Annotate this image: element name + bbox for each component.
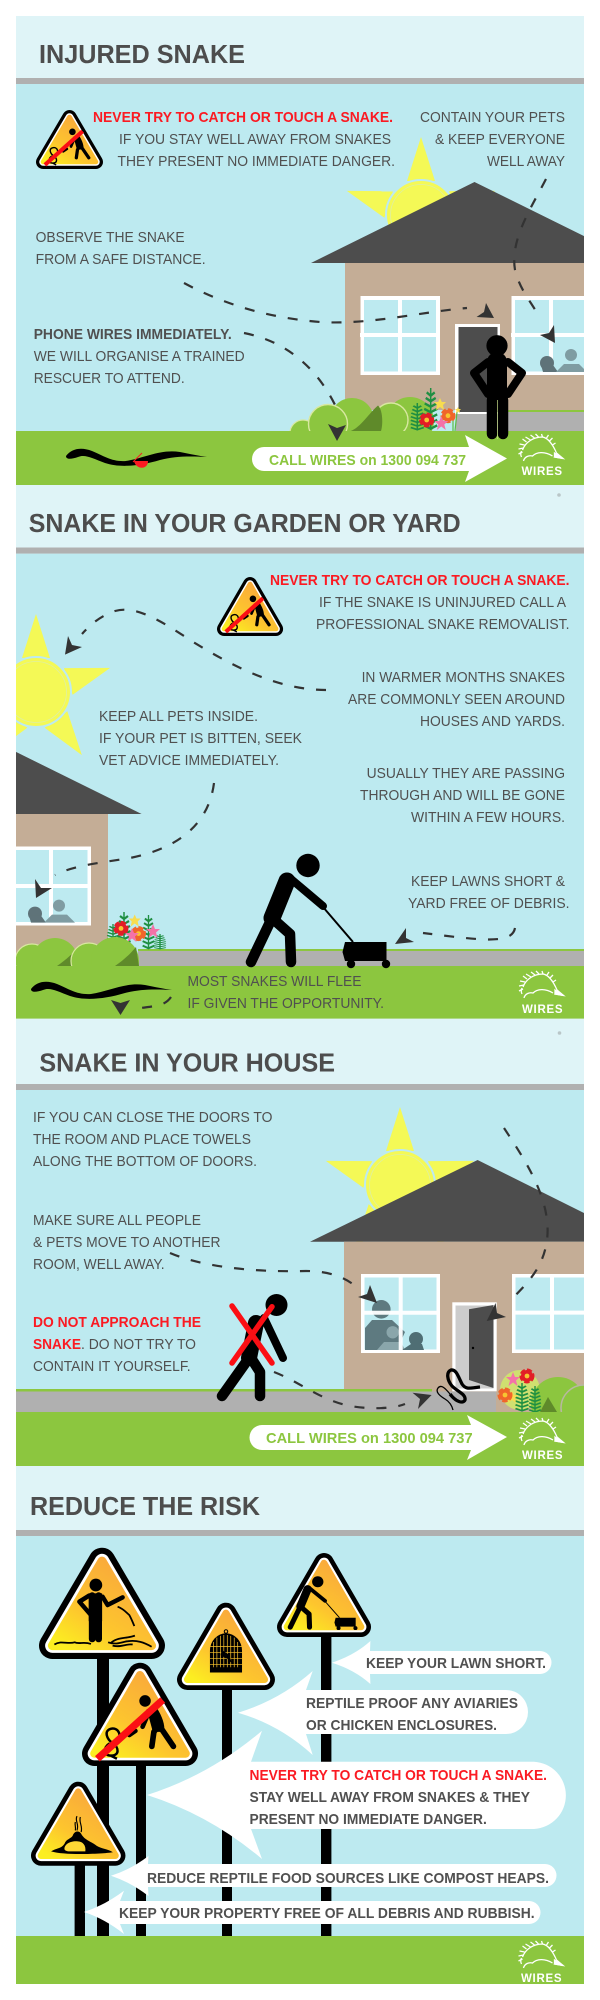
text: contain pets [420, 109, 565, 170]
text: keep lawns short: YARD FREE OF DEBRIS. [408, 895, 570, 912]
text: do not approach: SNAKE [33, 1336, 81, 1353]
panel: snake in house [16, 1050, 600, 1466]
heading: reduce the risk: REDUCE THE RISK [30, 1493, 261, 1521]
dashed arrow: move people [170, 1253, 377, 1303]
bushes and flowers [499, 1370, 600, 1431]
sign: compost [41, 1792, 115, 1856]
warning sign: do not touch [224, 584, 276, 632]
dashed arrow: lawns [395, 928, 515, 944]
sign: debris [52, 1561, 152, 1647]
sun [0, 614, 115, 763]
dashed arrow: close doors [487, 1128, 548, 1321]
callout: aviaries: OR CHICKEN ENCLOSURES. [306, 1717, 497, 1734]
heading: injured snake: INJURED SNAKE [39, 41, 245, 69]
callout: lawn: KEEP YOUR LAWN SHORT. [366, 1655, 546, 1672]
snake at door [437, 1370, 480, 1410]
text: warmer months [348, 669, 565, 730]
text: do not approach: DO NOT APPROACH THE [33, 1314, 201, 1331]
callout: debris: KEEP YOUR PROPERTY FREE OF ALL DEBRIS AND RUBBISH. [119, 1905, 535, 1922]
sign: do not catch [94, 1675, 186, 1759]
person with red cross [222, 1294, 288, 1396]
text: close doors: IF YOU CAN CLOSE THE DOORS TO [33, 1109, 272, 1126]
wires logo: WIRES [522, 1004, 563, 1016]
callout: food sources [111, 1856, 556, 1896]
dashed arrow: snake flee [111, 997, 171, 1015]
wires logo: WIRES [522, 1450, 563, 1462]
text: move people and pets: & PETS MOVE TO ANOTHER [33, 1234, 221, 1251]
panel: snake in garden [0, 510, 584, 1035]
sign posts [75, 1630, 331, 1936]
dashed arrow: phone [244, 333, 346, 441]
call wires arrow: CALL WIRES on 1300 094 737 [269, 452, 466, 469]
callout: never catch: PRESENT NO IMMEDIATE DANGER. [250, 1811, 487, 1828]
callout: lawn [332, 1641, 552, 1684]
dashed arrow: to snake [274, 1372, 432, 1409]
family in window [365, 1300, 424, 1350]
sign: mower [287, 1563, 361, 1630]
text: contain pets: & KEEP EVERYONE [435, 131, 565, 148]
wires logo: WIRES [522, 466, 562, 478]
text: keep pets inside: KEEP ALL PETS INSIDE. [99, 708, 258, 725]
text: passing through: USUALLY THEY ARE PASSING [367, 765, 565, 782]
text: close doors: ALONG THE BOTTOM OF DOORS. [33, 1153, 257, 1170]
panel: reduce the risk [16, 1493, 584, 1985]
flowers [107, 912, 166, 950]
text: never touch [93, 109, 395, 170]
heading: snake in your house: SNAKE IN YOUR HOUSE [39, 1050, 335, 1078]
text: warmer months: HOUSES AND YARDS. [420, 713, 565, 730]
text: never touch: PROFESSIONAL SNAKE REMOVALIST. [316, 616, 570, 633]
text: move people and pets [33, 1212, 221, 1273]
text: warmer months: IN WARMER MONTHS SNAKES [362, 669, 565, 686]
text: do not approach [33, 1314, 201, 1375]
text: phone wires [34, 326, 245, 387]
bushes [290, 397, 434, 446]
wires logo [519, 1418, 564, 1462]
heading: garden or yard: SNAKE IN YOUR GARDEN OR YARD [29, 510, 461, 538]
text: never touch [270, 572, 570, 633]
text: phone wires: RESCUER TO ATTEND. [34, 370, 185, 387]
text: phone wires: WE WILL ORGANISE A TRAINED [34, 348, 245, 365]
callout: food sources: REDUCE REPTILE FOOD SOURCES LIKE COMPOST HEAPS. [147, 1870, 549, 1887]
text: close doors: THE ROOM AND PLACE TOWELS [33, 1131, 251, 1148]
callout: never catch: NEVER TRY TO CATCH OR TOUCH A SNAKE. [250, 1767, 547, 1784]
sign: aviary [187, 1613, 265, 1680]
text: never touch: IF YOU STAY WELL AWAY FROM SNAKES [119, 131, 391, 148]
text: observe: OBSERVE THE SNAKE [36, 229, 185, 246]
wires logo [519, 971, 564, 1016]
text: never touch: NEVER TRY TO CATCH OR TOUCH A SNAKE. [93, 109, 393, 126]
call wires arrow [252, 435, 507, 482]
text: move people and pets: MAKE SURE ALL PEOPLE [33, 1212, 201, 1229]
person mowing lawn [251, 854, 390, 968]
callout: aviaries [238, 1671, 528, 1755]
call wires arrow [249, 1415, 507, 1460]
warning sign: do not touch [43, 117, 96, 165]
text: passing through [360, 765, 565, 826]
text: never touch: IF THE SNAKE IS UNINJURED CALL A [319, 594, 566, 611]
text: contain pets: WELL AWAY [487, 153, 565, 170]
sun [342, 137, 500, 286]
text: keep lawns short [408, 873, 570, 912]
text: passing through: WITHIN A FEW HOURS. [411, 809, 565, 826]
text: keep pets inside: IF YOUR PET IS BITTEN, SEEK [99, 730, 302, 747]
wires logo [518, 1941, 563, 1985]
text: phone wires: PHONE WIRES IMMEDIATELY. [34, 326, 232, 343]
bushes [15, 937, 139, 985]
wires logo: WIRES [521, 1973, 562, 1985]
text: keep pets inside: VET ADVICE IMMEDIATELY. [99, 752, 279, 769]
text: snakes will flee [188, 973, 384, 1012]
text: move people and pets: ROOM, WELL AWAY. [33, 1256, 165, 1273]
text: close doors [33, 1109, 272, 1170]
callout: never catch [147, 1731, 566, 1859]
wires logo [518, 434, 563, 478]
callout: aviaries: REPTILE PROOF ANY AVIARIES [306, 1695, 518, 1712]
house [0, 744, 142, 966]
text: never touch: NEVER TRY TO CATCH OR TOUCH A SNAKE. [270, 572, 570, 589]
text: keep lawns short: KEEP LAWNS SHORT & [411, 873, 565, 890]
text: observe: FROM A SAFE DISTANCE. [36, 251, 206, 268]
dashed arrow: pets [514, 179, 555, 343]
house [311, 182, 600, 431]
call wires arrow: CALL WIRES on 1300 094 737 [266, 1430, 473, 1447]
injured snake illustration [66, 449, 207, 468]
dashed arrow: sun to house [65, 610, 326, 690]
snake illustration [31, 982, 172, 999]
text: do not approach: . DO NOT TRY TO [81, 1336, 196, 1353]
text: observe [36, 229, 206, 268]
panel: injured snake [16, 41, 600, 497]
dashed arrow: pets inside [35, 783, 214, 898]
house [16, 1160, 600, 1412]
text: snakes will flee: IF GIVEN THE OPPORTUNITY. [188, 995, 384, 1012]
text: snakes will flee: MOST SNAKES WILL FLEE [188, 973, 362, 990]
sun [321, 1107, 479, 1256]
person standing with hands on hips [474, 335, 522, 439]
text: never touch: THEY PRESENT NO IMMEDIATE DANGER. [118, 153, 395, 170]
text: warmer months: ARE COMMONLY SEEN AROUND [348, 691, 565, 708]
text: do not approach: CONTAIN IT YOURSELF. [33, 1358, 191, 1375]
text: contain pets: CONTAIN YOUR PETS [420, 109, 565, 126]
callout: never catch: STAY WELL AWAY FROM SNAKES & THEY [250, 1789, 530, 1806]
flowers [411, 388, 461, 431]
callout: debris [84, 1891, 540, 1934]
dashed arrow: observe [184, 283, 494, 322]
text: passing through: THROUGH AND WILL BE GONE [360, 787, 565, 804]
text: keep pets inside [99, 708, 302, 769]
